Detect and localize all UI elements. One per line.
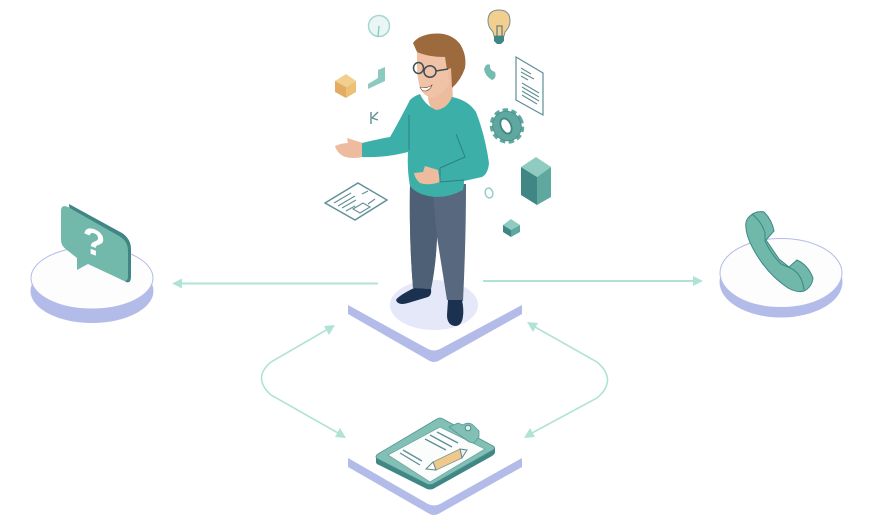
icon: orange cube [335,74,356,98]
icon: gear [487,106,527,146]
icon: small k mark [371,112,378,124]
bottom platform [348,458,522,515]
question mark: ? [83,218,105,268]
arrow: right loop between center and clipboard [524,322,608,438]
left hand [335,138,363,158]
icon: telephone [746,212,813,292]
icon: small comma shape [484,64,496,80]
neck [428,80,453,111]
icon: pale orb [368,16,390,37]
trousers [410,184,466,301]
icon: pencil [426,449,467,470]
sweater [362,94,489,197]
person [335,33,489,326]
left disc [30,247,154,323]
center platform [348,280,522,362]
glasses [414,62,448,77]
icon: tilted paper form [325,183,387,220]
icon: clipboard [376,418,495,490]
hair [413,33,465,88]
icon: document [516,57,543,115]
arrow: center to question bubble [172,278,378,288]
icon: small cube [503,219,520,237]
ear [448,68,458,82]
icon: question speech bubble [61,204,131,282]
face [417,50,452,98]
sweater fold lines [409,115,465,182]
arrow: center to phone [483,276,703,286]
arrow: left loop between center and clipboard [262,325,346,438]
right disc [720,238,842,318]
left shoe [396,288,431,304]
icon: small ring [484,187,494,199]
right shoe [447,300,463,326]
icon: light bulb [488,10,510,44]
smile [420,85,432,91]
icon: teal bracket [368,67,385,89]
icon: teal box [521,157,551,205]
belly hand [414,166,440,184]
